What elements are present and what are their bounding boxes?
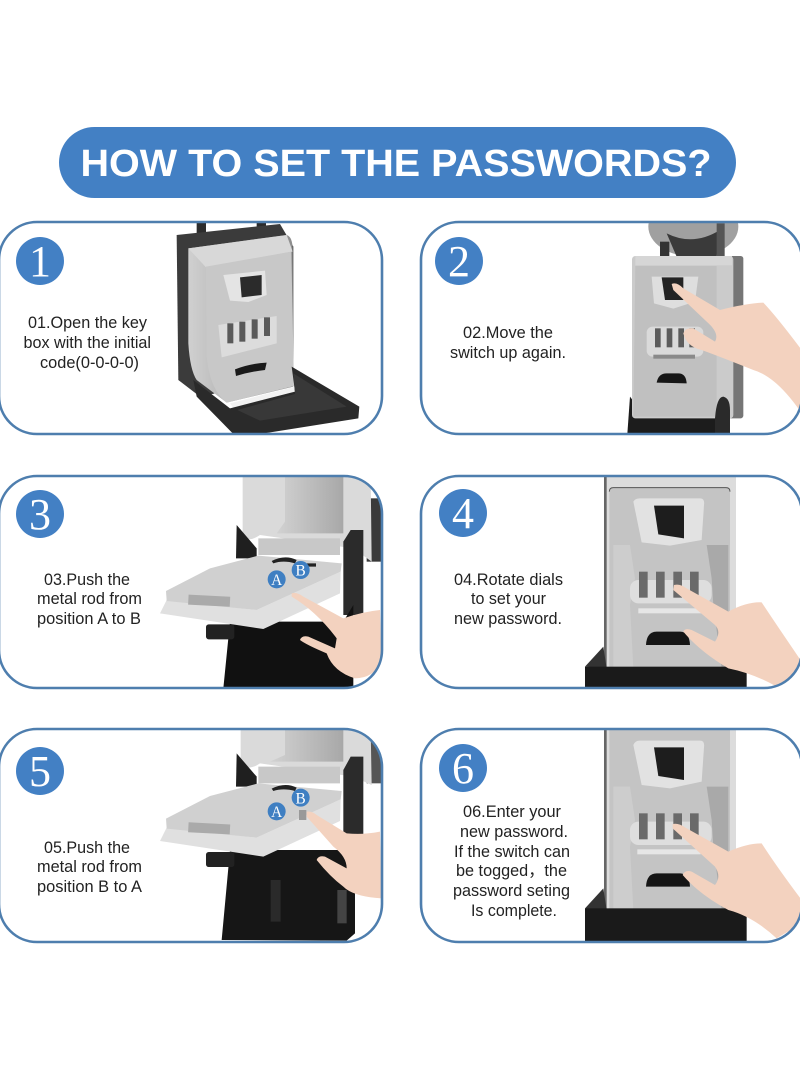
title banner: HOW TO SET THE PASSWORDS? (80, 143, 712, 185)
step number 2 (435, 237, 483, 286)
frame (0, 222, 382, 434)
step text: position A to B (37, 610, 141, 628)
step text: If the switch can (454, 843, 570, 861)
illustration: metal rod A to B (160, 475, 383, 688)
step text: 05.Push the (44, 839, 130, 857)
step text (24, 314, 151, 372)
step text: box with the initial (24, 334, 151, 352)
frame (421, 222, 800, 434)
frame (421, 729, 800, 942)
step text: new password. (454, 610, 562, 628)
illustration: metal rod B to A (160, 728, 383, 941)
label A: A (271, 804, 282, 821)
step number 6: 6 (452, 744, 474, 793)
step number 3 (16, 490, 64, 539)
panel: step 1 (0, 220, 382, 434)
label A (268, 570, 286, 589)
label B (292, 789, 310, 807)
illustration: rotate dials (585, 475, 800, 688)
illustration: enter new password (585, 728, 800, 942)
step text: be togged，the (456, 862, 567, 880)
step text (454, 571, 563, 628)
illustration: finger on switch (627, 223, 800, 433)
panel: step 2 (421, 197, 800, 434)
step number 4 (439, 489, 487, 538)
step text: 01.Open the key (28, 314, 148, 332)
step number 2: 2 (448, 237, 470, 286)
step text (450, 324, 566, 362)
step text: metal rod from (37, 590, 142, 608)
frame (0, 729, 382, 942)
title banner (59, 127, 736, 198)
step text: metal rod from (37, 858, 142, 876)
step text: switch up again. (450, 344, 566, 362)
step number 5 (16, 747, 64, 796)
frame (0, 476, 382, 688)
label A: A (271, 572, 282, 589)
panel: step 5 (0, 728, 383, 942)
step text: position B to A (37, 878, 142, 896)
step text (453, 803, 570, 920)
frame (421, 476, 800, 688)
step text: 02.Move the (463, 324, 553, 342)
step text: 04.Rotate dials (454, 571, 563, 589)
step number 1: 1 (29, 237, 51, 286)
label A (268, 802, 286, 821)
panel: step 3 (0, 475, 383, 688)
step number 1 (16, 237, 64, 286)
step text: code(0-0-0-0) (40, 354, 139, 372)
step number 3: 3 (29, 490, 51, 539)
step number 5: 5 (29, 747, 51, 796)
label B: B (296, 790, 306, 807)
step text (37, 839, 142, 896)
label B: B (296, 563, 306, 580)
label B (292, 561, 310, 580)
illustration: open key box (177, 220, 359, 434)
step text: Is complete. (471, 902, 557, 920)
step number 4: 4 (452, 489, 474, 538)
step number 6 (439, 744, 487, 793)
step text: 06.Enter your (463, 803, 562, 821)
step text: to set your (471, 590, 547, 608)
panel: step 6 (421, 728, 800, 942)
panel: step 4 (421, 475, 800, 688)
step text: 03.Push the (44, 571, 130, 589)
step text: new password. (460, 823, 568, 841)
step text (37, 571, 142, 628)
step text: password seting (453, 882, 570, 900)
